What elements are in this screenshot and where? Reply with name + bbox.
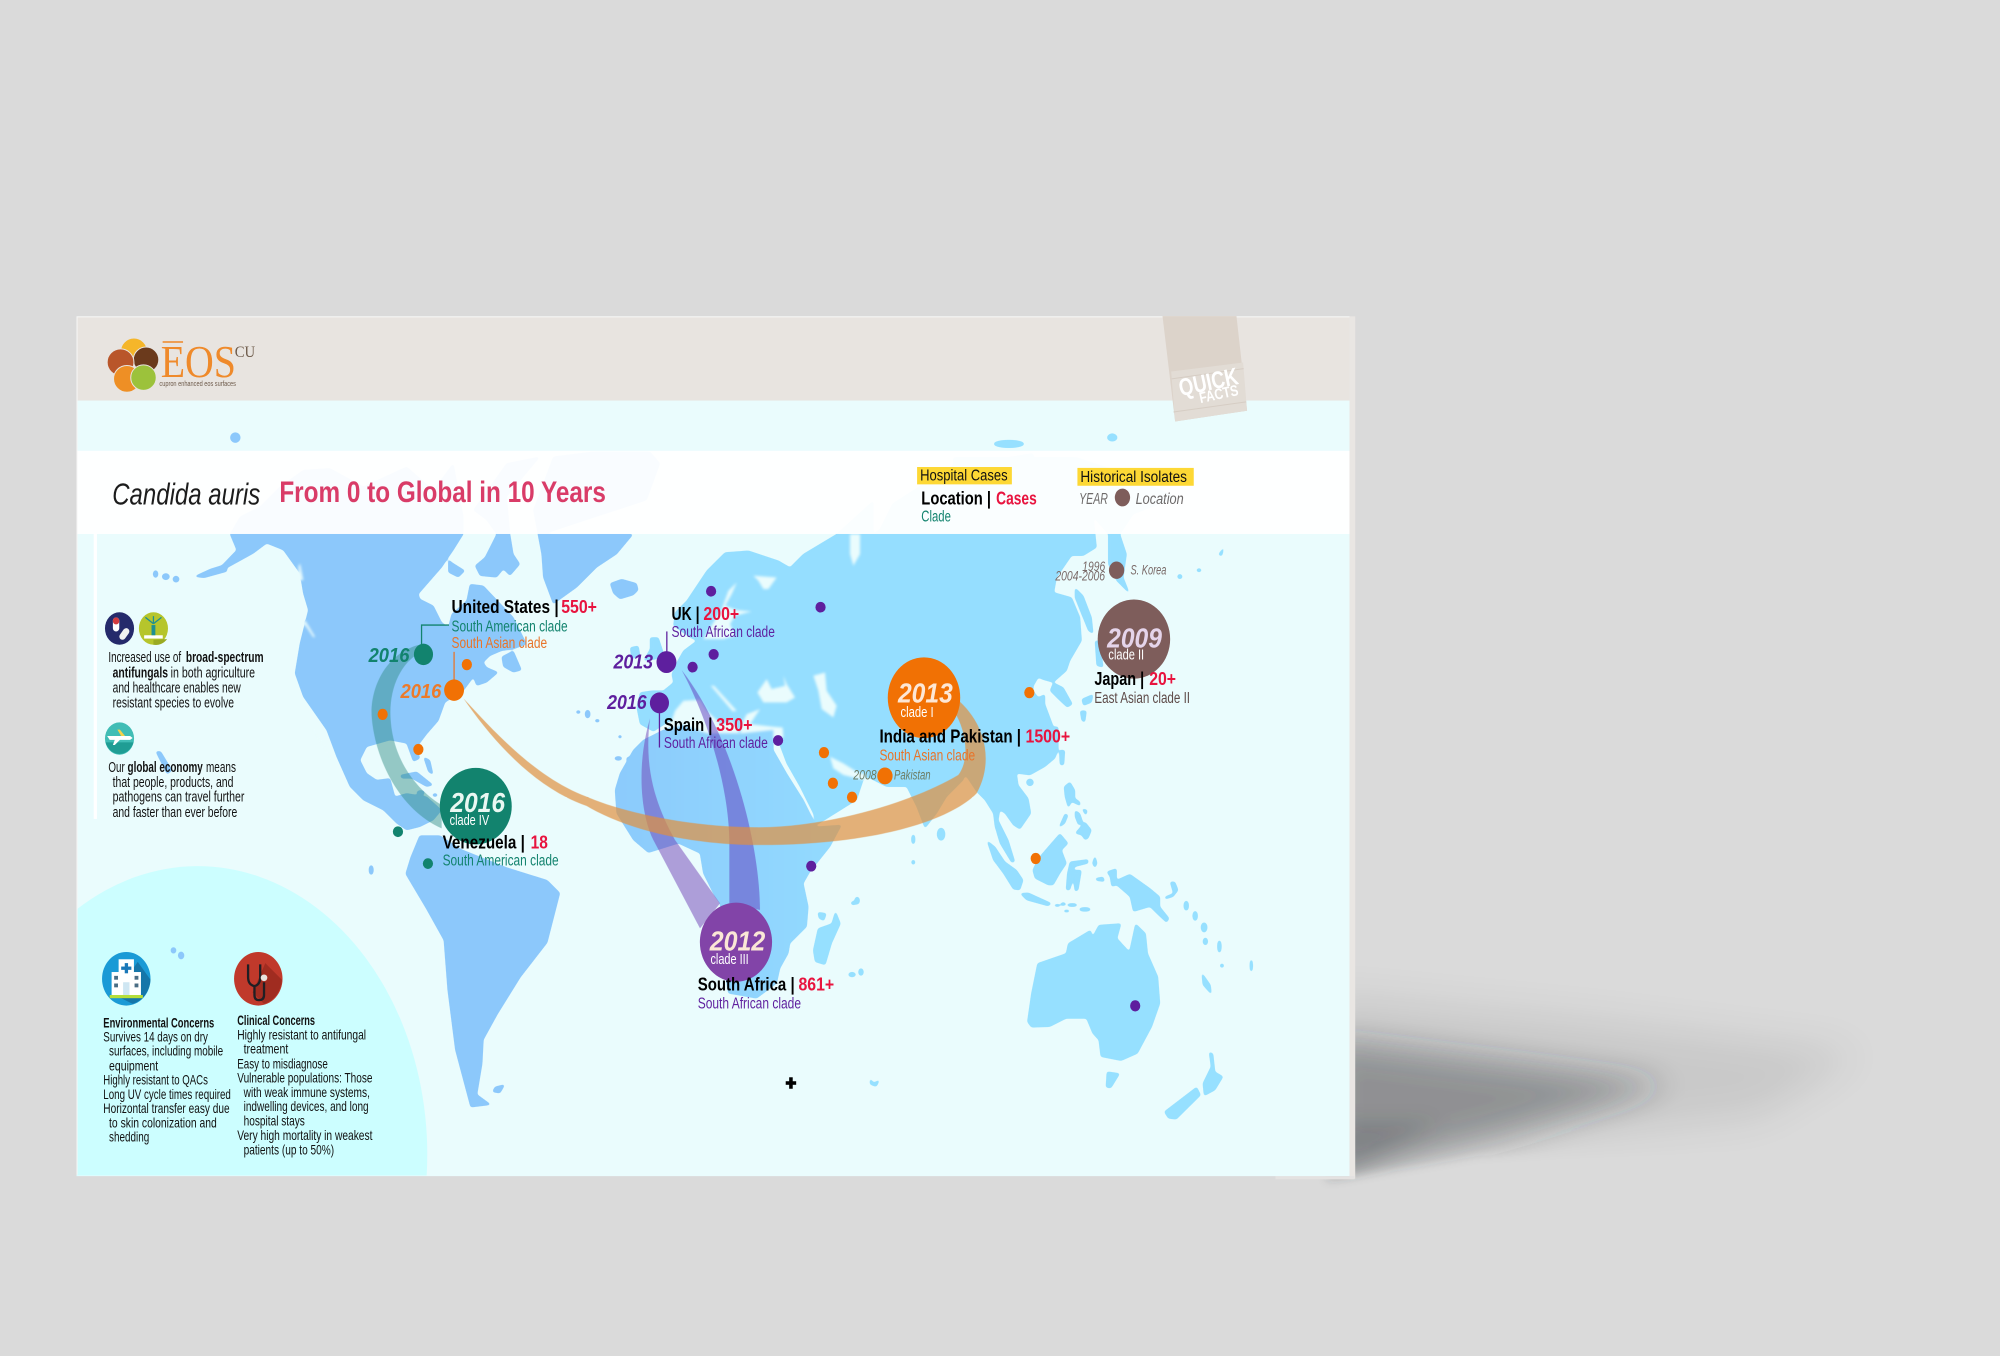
text: environmental concerns list: shedding bbox=[109, 1130, 149, 1145]
text: environmental concerns list: Highly resistant to QACs bbox=[103, 1072, 208, 1087]
marker: South Africa: clade III bbox=[710, 952, 749, 968]
text: broad-spectrum antifungals: resistant species to evolve bbox=[113, 695, 234, 711]
legend: hospital cases bbox=[917, 467, 1037, 526]
text: environmental concerns list: to skin colonization and bbox=[109, 1116, 217, 1131]
text: global economy: Our bbox=[108, 760, 125, 776]
marker: United States: South Asian clade bbox=[452, 635, 547, 652]
text: environmental concerns list: Environmental Concerns bbox=[103, 1015, 215, 1030]
text: global economy: and faster than ever before bbox=[113, 805, 237, 821]
marker: Japan: clade II bbox=[1108, 648, 1144, 664]
legend: hospital cases: Clade bbox=[921, 509, 951, 526]
text: clinical concerns list bbox=[237, 1013, 373, 1157]
marker: India and Pakistan bbox=[879, 657, 1070, 764]
panel: drivers of spread bbox=[105, 612, 264, 821]
marker: UK: 200+ bbox=[703, 603, 739, 624]
title: From 0 to Global in 10 Years bbox=[279, 476, 606, 509]
legend: historical isolates: Historical Isolates bbox=[1080, 469, 1187, 486]
historical isolate: Pakistan 2008: Pakistan bbox=[894, 767, 931, 782]
text: broad-spectrum antifungals: and healthcare enables new bbox=[113, 681, 241, 697]
map: Southeast Asia bbox=[953, 727, 1178, 923]
legend: historical isolates: YEAR bbox=[1079, 491, 1108, 508]
title bbox=[112, 476, 606, 512]
text: clinical concerns list: with weak immune systems, bbox=[243, 1085, 370, 1100]
text: broad-spectrum antifungals: Increased use of bbox=[108, 650, 182, 666]
marker: United States: South American clade bbox=[452, 618, 568, 635]
arc: South American clade spread to United States bbox=[372, 645, 442, 828]
text: clinical concerns list: patients (up to 50%) bbox=[244, 1142, 334, 1157]
marker: South Africa: 861+ bbox=[798, 974, 834, 995]
text: clinical concerns list: Clinical Concerns bbox=[237, 1013, 315, 1028]
panel: environmental concerns bbox=[102, 952, 231, 1145]
pale circle panel bbox=[77, 866, 427, 1175]
marker: India and Pakistan: India and Pakistan | bbox=[879, 725, 1021, 746]
panel: clinical concerns bbox=[234, 952, 373, 1157]
icon: hospital bbox=[102, 952, 151, 1006]
text: clinical concerns list: Easy to misdiagnose bbox=[237, 1056, 328, 1071]
marker: Japan: 20+ bbox=[1149, 668, 1176, 689]
map: Europe and west Russia bbox=[630, 501, 873, 740]
text: environmental concerns list: surfaces, including mobile bbox=[109, 1044, 223, 1059]
text: environmental concerns list: Long UV cycle times required bbox=[103, 1087, 231, 1102]
text: clinical concerns list: Highly resistant to antifungal bbox=[237, 1028, 366, 1043]
marker: Venezuela: South American clade bbox=[443, 853, 559, 870]
legend: hospital cases: Hospital Cases bbox=[920, 468, 1008, 485]
historical isolate: South Korea: 2004-2006 bbox=[1055, 568, 1106, 583]
map: Asia interior and south coast bbox=[777, 453, 1033, 828]
marker: UK: South African clade bbox=[672, 624, 775, 641]
legend: historical isolates: Location bbox=[1136, 491, 1184, 508]
text: environmental concerns list: equipment bbox=[109, 1058, 158, 1073]
location dots: orange bbox=[378, 659, 1041, 864]
marker: UK: 2013 bbox=[613, 651, 654, 673]
text: global economy: that people, products, and bbox=[113, 775, 233, 791]
legend: hospital cases: Location | bbox=[921, 488, 991, 509]
arc: South African clade spread to UK bbox=[682, 670, 760, 910]
marker: Venezuela: Venezuela | bbox=[443, 831, 525, 852]
marker: India and Pakistan: 2013 bbox=[897, 677, 953, 708]
text: clinical concerns list: Vulnerable populations: Those bbox=[237, 1070, 373, 1085]
marker: Japan: 2009 bbox=[1106, 622, 1162, 653]
map: Gulf of Ob bbox=[850, 534, 860, 566]
sheet background bbox=[77, 316, 1349, 1176]
marker: UK bbox=[613, 603, 775, 673]
historical isolate: South Korea: S. Korea bbox=[1130, 563, 1166, 578]
sheet edge bbox=[1276, 316, 1355, 1179]
marker: Japan: East Asian clade II bbox=[1094, 690, 1190, 707]
historical isolate: Pakistan 2008: 2008 bbox=[853, 767, 877, 782]
logo: CU bbox=[235, 343, 255, 361]
marker: Spain: South African clade bbox=[664, 735, 768, 752]
marker: South Africa: 2012 bbox=[709, 926, 766, 957]
historical isolate: South Korea bbox=[1055, 559, 1166, 583]
marker: United States: 550+ bbox=[561, 596, 597, 617]
marker: United States: United States | bbox=[452, 596, 559, 617]
map: Baltic Sea bbox=[703, 582, 752, 639]
marker: South Africa: South African clade bbox=[698, 995, 801, 1012]
historical isolate: South Korea: 1996 bbox=[1082, 559, 1106, 574]
left margin rule bbox=[94, 533, 97, 819]
map: Adriatic Sea bbox=[711, 686, 737, 711]
map: small Pacific islands and Alaska tip bbox=[153, 432, 373, 959]
title: Candida auris bbox=[112, 478, 260, 512]
map: inlets of North America bbox=[298, 563, 333, 761]
marker: United States bbox=[368, 596, 597, 703]
text: environmental concerns list: Survives 14 days on dry bbox=[103, 1030, 208, 1045]
text: clinical concerns list: hospital stays bbox=[244, 1114, 305, 1129]
logo: EOS bbox=[161, 336, 236, 387]
text: environmental concerns list bbox=[103, 1015, 231, 1145]
legend: historical isolates bbox=[1077, 468, 1194, 508]
marker: Venezuela bbox=[440, 768, 559, 870]
marker: UK: UK | bbox=[672, 603, 700, 624]
text: broad-spectrum antifungals: in both agriculture bbox=[171, 665, 255, 681]
marker: India and Pakistan: South Asian clade bbox=[879, 747, 975, 764]
marker: Venezuela: 18 bbox=[531, 831, 548, 852]
sheet highlight edge bbox=[77, 317, 1349, 1175]
map: North America and Greenland bbox=[220, 452, 660, 830]
map: Mediterranean Sea bbox=[668, 700, 783, 740]
marker: Venezuela: 2016 bbox=[449, 787, 505, 818]
text: global economy: means bbox=[206, 760, 236, 776]
sheet shadow bbox=[1327, 995, 1862, 1186]
arc: South African clade spread to Spain bbox=[642, 718, 720, 928]
text: clinical concerns list: treatment bbox=[244, 1042, 288, 1057]
map: remaining islands and Australia bbox=[813, 434, 1253, 1119]
header bar bbox=[77, 316, 1349, 401]
marker: Spain: 350+ bbox=[716, 714, 753, 735]
map: Black Sea bbox=[757, 676, 795, 702]
marker: United States: 2016 bbox=[368, 645, 410, 667]
marker: Venezuela: clade IV bbox=[450, 813, 489, 829]
white title band bbox=[77, 451, 1349, 534]
text: global economy: pathogens can travel further bbox=[113, 790, 244, 806]
marker: Japan bbox=[1094, 600, 1190, 707]
map: Africa bbox=[615, 725, 842, 998]
marker: Spain bbox=[606, 692, 768, 752]
text: broad-spectrum antifungals bbox=[108, 650, 264, 711]
logo: cupron enhanced eos surfaces bbox=[159, 380, 236, 388]
marker: Japan: Japan | bbox=[1094, 668, 1144, 689]
icon: plus cursor bbox=[786, 1077, 796, 1089]
quick facts tag: QUICK bbox=[1176, 363, 1241, 402]
arc: South Asian clade spread to United States bbox=[463, 698, 986, 845]
logo bbox=[107, 336, 255, 392]
map: Arabian and Persian seas bbox=[830, 757, 867, 780]
map: South America bbox=[406, 836, 560, 1107]
marker: India and Pakistan: clade I bbox=[901, 705, 934, 721]
marker: South Africa: South Africa | bbox=[698, 974, 795, 995]
quick facts tag bbox=[1162, 316, 1247, 421]
text: global economy: global economy bbox=[128, 760, 203, 776]
text: clinical concerns list: Very high mortality in weakest bbox=[237, 1128, 373, 1143]
quick facts tag: FACTS bbox=[1198, 382, 1240, 407]
text: clinical concerns list: indwelling devices, and long bbox=[244, 1099, 369, 1114]
world map bbox=[153, 432, 1253, 1119]
map: White Sea bbox=[753, 576, 777, 589]
icon: sprinkler bbox=[139, 612, 168, 645]
marker: United States: 2016 bbox=[400, 681, 442, 703]
text: broad-spectrum antifungals: broad-spectrum bbox=[186, 650, 264, 666]
map: Caspian Sea bbox=[813, 672, 837, 717]
historical isolate: Pakistan 2008 bbox=[853, 767, 931, 784]
map: East Asia bbox=[953, 457, 1177, 751]
icon: medication capsules bbox=[105, 612, 134, 645]
text: broad-spectrum antifungals: antifungals bbox=[113, 665, 168, 681]
marker: Spain: 2016 bbox=[606, 692, 647, 714]
text: environmental concerns list: Horizontal transfer easy due bbox=[103, 1101, 230, 1116]
location dots: teal bbox=[393, 826, 433, 869]
icon: stethoscope bbox=[234, 952, 283, 1006]
marker: South Africa bbox=[698, 903, 834, 1012]
marker: Spain: Spain | bbox=[664, 714, 712, 735]
legend: hospital cases: Cases bbox=[996, 488, 1037, 509]
location dots: purple bbox=[688, 586, 1140, 1011]
text: global economy bbox=[108, 760, 244, 821]
marker: India and Pakistan: 1500+ bbox=[1026, 725, 1070, 746]
icon: airplane bbox=[105, 722, 134, 755]
